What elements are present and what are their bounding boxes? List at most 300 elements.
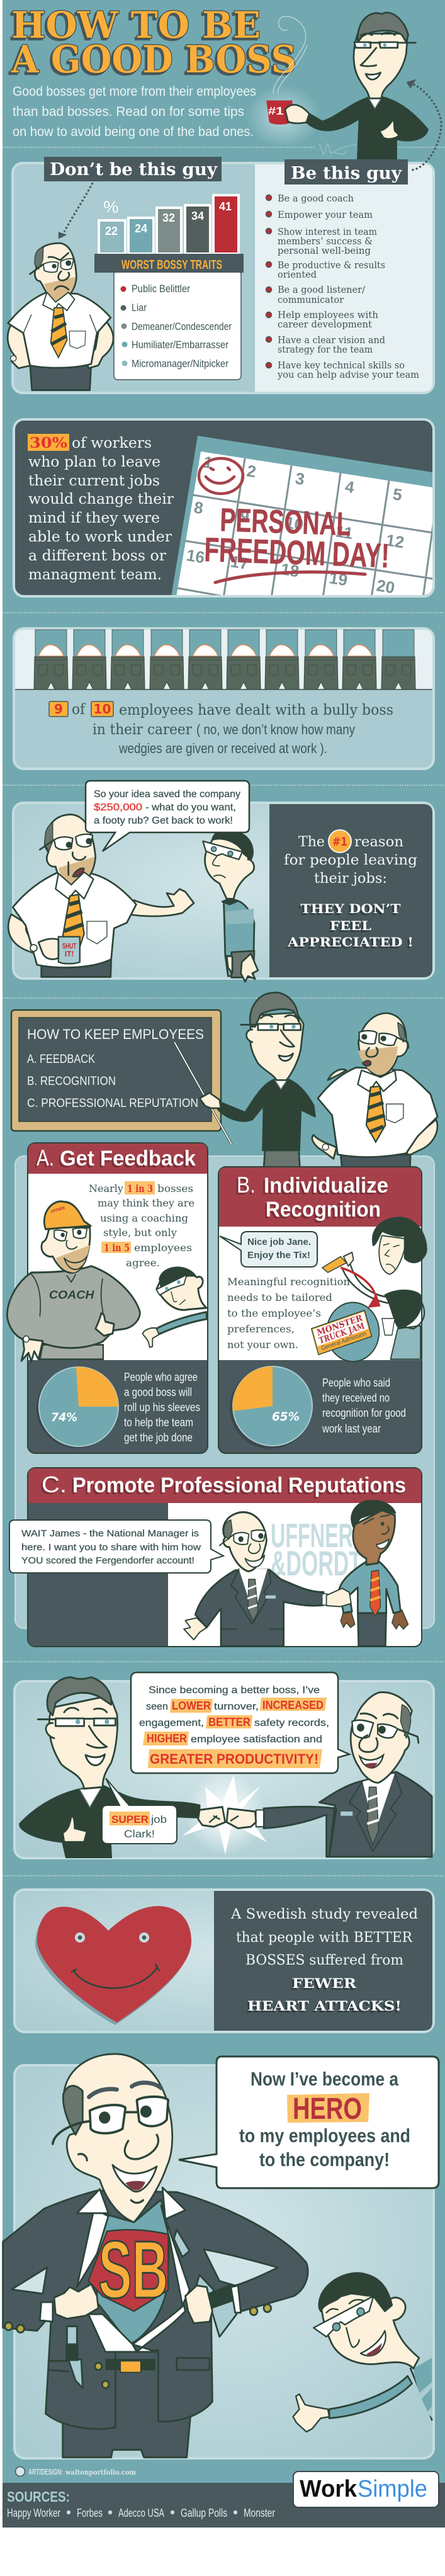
coach legs	[40, 1345, 103, 1359]
panel: tips background	[15, 1156, 434, 1628]
sidekick glasses	[313, 2296, 373, 2337]
glow behind mug	[245, 85, 321, 148]
hand on mug	[285, 105, 309, 123]
footer: sources	[3, 2483, 445, 2528]
coach glasses	[54, 1228, 87, 1241]
characters: coach, employee, Jane	[7, 1201, 426, 1361]
mug: shut it: IT!	[65, 950, 74, 958]
text: 9 of 10 employees: of	[72, 701, 86, 718]
thumbs up hand	[379, 120, 399, 139]
arms	[8, 317, 31, 368]
pocket	[87, 921, 107, 944]
speech bubble: boss to employee: a footy rub? Get back to work!	[94, 815, 233, 826]
body text: may think they are	[98, 1197, 194, 1209]
divider lines	[3, 147, 445, 1876]
Jane arms	[342, 1260, 388, 1303]
list: be this guy traits: Have a clear vision and	[278, 334, 385, 346]
legend: worst bossy traits	[94, 254, 244, 380]
bubble text: turnover,	[214, 1701, 259, 1712]
speech bubble: wait James: WAIT James - the National Manager is	[21, 1528, 199, 1539]
calendar dates: 8	[193, 497, 205, 518]
list: be this guy traits: career development	[278, 319, 372, 330]
characters: fist bump	[20, 1677, 432, 1858]
text: #1 reason for leaving: reason	[354, 834, 403, 850]
text: 30% of workers: their current jobs	[28, 473, 160, 489]
speech bubble: hero: to the company!	[259, 2148, 390, 2170]
title	[11, 4, 296, 82]
face	[359, 1713, 419, 1752]
text: Swedish study: FEWER	[292, 1975, 357, 1991]
employee head	[353, 1510, 395, 1565]
pocket flaps and buttons	[48, 2358, 210, 2371]
speech bubble: hero	[179, 2057, 439, 2188]
body text: agree.	[126, 1257, 160, 1269]
highlight 30%: 30%	[30, 434, 67, 451]
speech bubble: since becoming a better boss	[131, 1672, 349, 1773]
glasses	[354, 42, 398, 48]
coach head	[42, 1226, 90, 1273]
head	[35, 243, 76, 302]
calendar dates: 3	[294, 468, 306, 489]
jaw shadow	[44, 277, 76, 302]
list: be this guy traits: communicator	[278, 294, 344, 305]
belt and buckle	[106, 2359, 155, 2373]
pie caption B: recognition for good	[322, 1407, 406, 1419]
coach sweatshirt	[7, 1266, 140, 1348]
glasses	[54, 834, 93, 849]
legend items	[121, 283, 232, 370]
bar 22: 22	[105, 225, 118, 237]
pants	[42, 959, 111, 977]
red arrow	[341, 1268, 377, 1303]
list: be this guy traits: strategy for the team	[278, 344, 373, 355]
text: Swedish study: A Swedish study revealed	[230, 1907, 418, 1922]
shirt	[8, 292, 111, 368]
bar 32: 32	[162, 212, 175, 224]
badge #1	[329, 830, 351, 853]
cap	[44, 1201, 91, 1229]
pie caption A: roll up his sleeves	[124, 1401, 200, 1414]
pie chart 74%	[37, 1367, 118, 1448]
heading B: B.	[237, 1172, 256, 1198]
arrows: dotted pointers	[59, 79, 441, 239]
collars	[77, 2187, 185, 2219]
boss arms	[312, 1120, 437, 1159]
collar and tie	[358, 1070, 397, 1091]
speech bubble: super job Clark: Clark!	[124, 1828, 155, 1840]
heading B: Individualize	[264, 1174, 388, 1198]
cuff	[256, 1810, 264, 1827]
list: be this guy traits: Be productive & results	[278, 259, 385, 271]
body text: Meaningful recognition	[227, 1276, 350, 1288]
employee tie	[370, 1570, 381, 1616]
suit boss head	[351, 1692, 412, 1783]
bar 41	[213, 195, 239, 254]
text: 30% of workers: of workers	[72, 435, 152, 451]
heading C: C.	[42, 1472, 67, 1497]
lapels	[349, 1773, 402, 1851]
hair	[45, 823, 53, 851]
handwritten text	[205, 508, 388, 568]
text: 30% of workers	[28, 434, 174, 583]
mug	[266, 101, 292, 125]
shirt flaps	[77, 2206, 189, 2305]
logo: WorkSimple: Simple	[358, 2476, 427, 2502]
legend items: Liar	[132, 302, 147, 314]
speech bubble: since becoming a better boss: HIGHER	[147, 1732, 187, 1745]
text: 30% of workers: able to work under	[28, 529, 172, 545]
text: #1 reason for leaving: APPRECIATED !	[287, 934, 414, 950]
collar	[368, 97, 382, 108]
hand	[344, 1252, 354, 1266]
text: Swedish study	[230, 1907, 418, 2014]
speech bubble: super job Clark: job	[150, 1813, 167, 1825]
jaw shadow	[59, 856, 94, 885]
list: be this guy traits: Help employees with	[278, 309, 378, 321]
lapels	[222, 1569, 284, 1629]
badge 10: 10	[93, 701, 111, 717]
pants	[63, 2347, 191, 2458]
body text: style, but only	[103, 1227, 177, 1239]
speech bubble: wait James: YOU scored the Fergendorfer account!	[21, 1555, 194, 1566]
coffee steam	[273, 16, 307, 94]
list: be this guy traits: Empower your team	[278, 209, 373, 220]
speech bubble: super job Clark: SUPER	[111, 1813, 149, 1825]
panel: better boss fist bump	[14, 1681, 434, 1858]
panel: #1 reason	[13, 803, 434, 979]
bar 41: 41	[219, 200, 232, 213]
text: 9 of 10 employees	[49, 701, 393, 756]
under-shirt	[97, 2199, 169, 2344]
text: 30% of workers: managment team.	[28, 567, 162, 583]
speech bubble: since becoming a better boss: BETTER	[208, 1716, 251, 1728]
glasses	[352, 1720, 398, 1738]
employee arm thumbs down	[156, 1312, 206, 1334]
gaps between arms and body	[11, 2249, 278, 2294]
shirt	[13, 872, 136, 968]
head	[354, 34, 408, 98]
body text: 1 in 3	[127, 1183, 153, 1194]
head	[359, 1013, 408, 1076]
sweater	[218, 1079, 315, 1150]
calendar dates: 11	[334, 521, 354, 543]
eyebrows	[89, 2083, 161, 2097]
heading B: Recognition	[266, 1198, 381, 1222]
heading B	[237, 1172, 388, 1222]
Jane head	[379, 1235, 406, 1274]
highlights	[143, 1698, 327, 1768]
text: 9 of 10 employees: ( no, we don’t know how many	[196, 722, 355, 737]
sidekick arm	[329, 2376, 412, 2418]
company logo	[271, 1517, 362, 1583]
calendar dates: 5	[391, 484, 403, 504]
legend items: Public Belittler	[132, 283, 190, 295]
body text: preferences,	[227, 1324, 295, 1335]
calendar dates: 9	[239, 506, 251, 526]
boss bent arm	[8, 914, 59, 959]
emblem	[88, 2224, 168, 2315]
nose and mouth	[55, 271, 69, 290]
fists	[198, 1807, 225, 1827]
speech bubble: hero: Now I’ve become a	[251, 2068, 399, 2090]
panel: heart study	[14, 1890, 434, 2032]
footer: sources: Monster	[244, 2507, 275, 2519]
jacket	[3, 2191, 308, 2429]
character: good boss with mug: #1	[268, 105, 284, 117]
list: be this guy traits: oriented	[278, 269, 317, 280]
suit boss body	[195, 1570, 324, 1646]
text: #1 reason for leaving: The	[298, 834, 325, 850]
list: be this guy traits: personal well-being	[278, 245, 371, 256]
character: good boss with mug	[266, 13, 427, 159]
calendar dates: 4	[344, 477, 356, 497]
speech bubble: nice job jane	[220, 1232, 317, 1267]
card B: individualize recognition	[218, 1167, 422, 1453]
pie chart 65%	[230, 1366, 312, 1449]
chalkboard: how to keep employees	[11, 1010, 221, 1131]
shirt	[363, 1773, 395, 1833]
handwritten text: PERSONAL	[220, 502, 351, 543]
pie caption A	[124, 1371, 200, 1444]
pie caption B: work last year	[322, 1422, 381, 1435]
head	[250, 1013, 303, 1080]
title: A GOOD BOSS	[11, 38, 296, 82]
wedgie row: ten pairs of pants	[34, 630, 415, 689]
cuff and hand	[322, 1594, 327, 1605]
body text: employees	[134, 1242, 192, 1254]
underline	[215, 572, 365, 582]
title: HOW TO BE	[11, 4, 261, 47]
calendar dates: 16	[185, 545, 206, 567]
text: 30% of workers: who plan to leave	[28, 454, 161, 470]
bubble text: Since becoming a better boss, I’ve	[149, 1685, 320, 1696]
boss extended arm	[128, 889, 194, 916]
sidekick face	[327, 2300, 363, 2347]
list: be this guy traits: Be a good coach	[278, 193, 354, 204]
watch	[11, 356, 16, 361]
collar and tie	[55, 872, 94, 899]
footer: sources: Forbes	[77, 2507, 103, 2519]
list: be this guy traits: Be a good listener/	[278, 284, 366, 295]
list: be this guy traits: you can help advise your team	[277, 369, 419, 380]
employee head	[205, 829, 254, 899]
employee head	[157, 1271, 206, 1310]
characters: boss and deflated employee	[8, 814, 258, 982]
characters: good boss with pointer and bad boss	[174, 992, 437, 1169]
cuffs	[40, 2286, 241, 2322]
employee pants	[358, 1610, 386, 1646]
speech bubble: since becoming a better boss: INCREASED	[262, 1699, 324, 1711]
sidekick head	[321, 2287, 419, 2368]
text: 9 of 10 employees: in their career	[93, 722, 192, 738]
pants boss	[341, 1155, 410, 1169]
speech bubble: wait James	[9, 1520, 223, 1573]
glasses	[258, 1024, 301, 1030]
list: be this guy traits	[266, 193, 419, 380]
text: 9 of 10 employees: wedgies are given or received at work ).	[118, 740, 327, 756]
speech bubble: hero: to my employees and	[239, 2125, 410, 2147]
text: Swedish study: BOSSES suffered from	[245, 1953, 403, 1968]
hand	[200, 1092, 221, 1108]
percent sign: %	[103, 197, 119, 217]
employee shirt	[339, 1561, 400, 1613]
thought circle and ticket: TRUCK JAM	[318, 1321, 366, 1346]
face	[361, 33, 395, 66]
text: #1 reason for leaving: FEEL	[330, 918, 371, 933]
glasses	[234, 1530, 266, 1545]
credit: art and design: ART/DESIGN:	[28, 2467, 63, 2477]
heading: be this guy: Be this guy	[291, 164, 402, 183]
speech bubble: boss to employee: So your idea saved the company	[94, 789, 240, 800]
body text	[89, 1183, 194, 1269]
bar 34: 34	[191, 210, 204, 222]
calendar dates	[185, 452, 405, 597]
glasses	[359, 1031, 397, 1045]
body text	[227, 1276, 350, 1351]
calendar dates: 10	[284, 513, 305, 534]
speech bubble: nice job jane: Nice job Jane.	[247, 1237, 311, 1247]
cap logo: UFFNER	[50, 1206, 65, 1215]
footer: sources: Gallup Polls	[181, 2507, 227, 2519]
pocket	[386, 1104, 403, 1123]
glasses	[90, 2097, 168, 2133]
suit boss hand at left	[184, 1618, 206, 1640]
logo: WorkSimple	[293, 2471, 439, 2507]
intro text: on how to avoid being one of the bad ones.	[13, 125, 254, 139]
text: 9 of 10 employees: employees have dealt with a bully boss	[119, 702, 393, 718]
calendar dates: 19	[328, 568, 349, 589]
good boss sweater	[20, 1786, 200, 1858]
body text: using a coaching	[100, 1212, 188, 1224]
pie chart 74%: 74%	[51, 1410, 77, 1424]
calendar dates: 2	[245, 461, 257, 481]
bar chart: worst bossy traits	[99, 195, 239, 254]
smiley	[199, 458, 243, 494]
speech bubble: boss to employee: - what do you want,	[145, 802, 236, 813]
employee hands	[341, 1610, 408, 1629]
head	[45, 814, 96, 886]
speech bubble: nice job jane: Enjoy the Tix!	[247, 1250, 310, 1261]
character: bad boss arms on hips	[8, 243, 113, 390]
speech bubble: boss to employee: $250,000	[94, 802, 142, 813]
mug: shut it: SHUT	[62, 942, 77, 950]
hair	[358, 13, 408, 42]
thought circle and ticket: General Admission	[320, 1330, 368, 1353]
heading: don't be this guy: Don’t be this guy	[50, 160, 218, 179]
pie chart 65%: 65%	[272, 1410, 300, 1424]
tie pieces	[67, 2326, 82, 2388]
bar 32	[157, 208, 181, 254]
coach face	[64, 1240, 87, 1269]
pie caption B: People who said	[322, 1376, 390, 1389]
pie caption B	[322, 1376, 406, 1435]
good boss head	[49, 1696, 118, 1789]
text: Swedish study: HEART ATTACKS!	[247, 1998, 402, 2014]
hands	[54, 2284, 98, 2318]
card C: promote professional reputations	[28, 1468, 422, 1647]
card A: get feedback	[28, 1143, 208, 1453]
thought circle and ticket	[312, 1302, 379, 1361]
characters: boss in suit with employee	[184, 1501, 408, 1646]
text: #1 reason for leaving: for people leaving	[284, 853, 417, 868]
Jane body	[390, 1325, 420, 1359]
bar 24: 24	[135, 222, 147, 235]
intro text: Good bosses get more from their employees	[13, 84, 256, 99]
body text: 1 in 5	[104, 1242, 130, 1254]
thumbs hand	[63, 1816, 87, 1842]
legend header: WORST BOSSY TRAITS	[121, 258, 222, 272]
text: #1 reason for leaving	[284, 830, 417, 950]
text: 30% of workers: would change their	[28, 491, 174, 508]
pie caption A: get the job done	[124, 1431, 193, 1444]
pants	[264, 1149, 300, 1169]
pie caption A: People who agree	[124, 1371, 198, 1383]
calendar: personal freedom day	[170, 436, 441, 604]
text: #1 reason for leaving: THEY DON’T	[301, 901, 401, 916]
list: be this guy traits: Show interest in team	[278, 226, 377, 237]
bar 24	[128, 218, 154, 254]
suit boss	[264, 1772, 432, 1857]
legend items: Demeaner/Condescender	[132, 321, 232, 332]
arm holding mug	[307, 97, 371, 130]
pocket	[69, 331, 86, 349]
face	[64, 1708, 107, 1748]
speech bubble: since becoming a better boss: LOWER	[172, 1699, 211, 1712]
panel: hero	[14, 2065, 434, 2458]
calendar dates: 20	[375, 576, 396, 597]
company logo: &DORDT	[271, 1543, 362, 1583]
shirt and tie	[239, 1569, 268, 1614]
face	[261, 1015, 296, 1047]
badge 9: 9	[54, 701, 63, 717]
bar 34	[185, 205, 210, 254]
list: be this guy traits: members’ success &	[278, 235, 373, 247]
badge #1: #1	[332, 835, 347, 849]
legend items: Micromanager/Nitpicker	[132, 358, 228, 370]
mug: shut it	[59, 937, 80, 964]
hair	[35, 247, 43, 270]
list: be this guy traits: Have key technical skills so	[278, 360, 405, 371]
panel: 30% of workers	[14, 419, 434, 596]
sweater body	[357, 97, 427, 159]
face lines	[40, 840, 86, 860]
text: 30% of workers: mind if they were	[28, 510, 160, 526]
chalkboard: how to keep employees: A. FEEDBACK	[27, 1053, 95, 1066]
heading A: A.	[37, 1145, 54, 1171]
coach text: COACH	[49, 1288, 94, 1302]
bubble text: employee satisfaction and	[191, 1734, 322, 1745]
heading C: Promote Professional Reputations	[72, 1473, 406, 1497]
calendar dates: 18	[279, 559, 300, 581]
icon: smiling heart	[35, 1906, 191, 2025]
sidekick hand	[293, 2394, 329, 2432]
coach thumb hand	[96, 1314, 114, 1336]
body text: to the employee’s	[227, 1308, 321, 1319]
panel: don't / be this guy	[13, 163, 434, 393]
pie caption A: to help the team	[124, 1416, 193, 1429]
text: 30% of workers: a different boss or	[28, 548, 166, 564]
body text: needs to be tailored	[227, 1292, 332, 1303]
face	[79, 2135, 158, 2203]
hair	[63, 2085, 82, 2135]
pointer	[174, 1042, 232, 1144]
bubble text: engagement,	[139, 1718, 204, 1728]
speech bubble: boss to employee	[86, 781, 249, 851]
bubble text	[139, 1685, 329, 1745]
emblem: SB	[98, 2224, 168, 2315]
hand on mug	[38, 939, 59, 959]
glasses	[43, 259, 74, 272]
